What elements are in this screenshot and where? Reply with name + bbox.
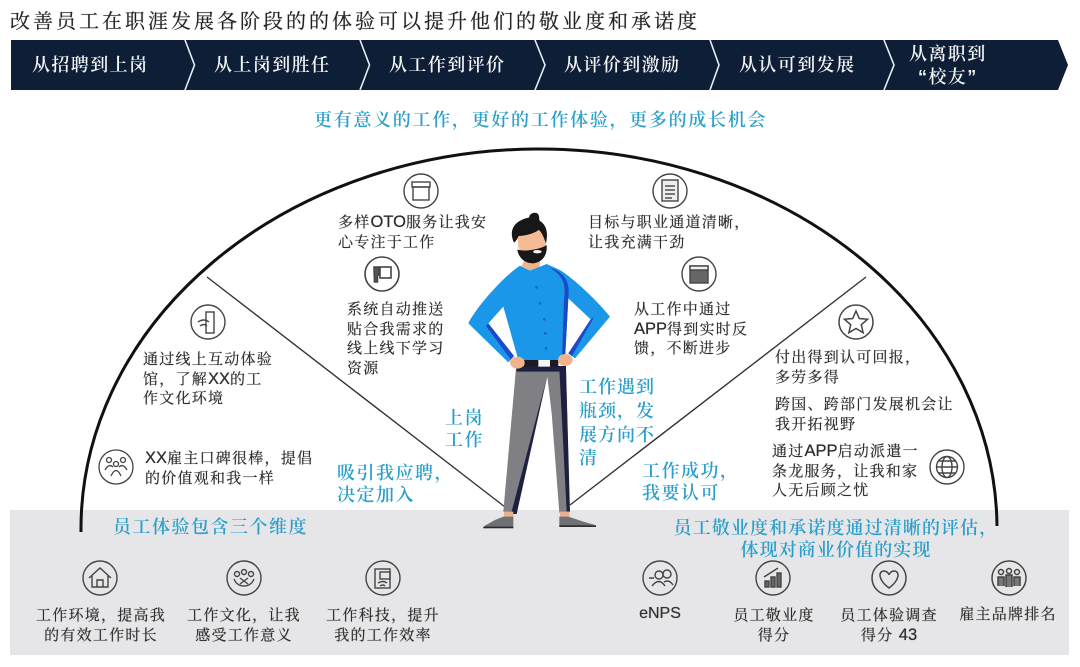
text: dispatch service [772,442,919,499]
text: clear goals [588,214,751,250]
grey foundation band [10,510,1069,655]
text: push learning [347,301,445,376]
icon: culture group [227,561,261,595]
text: reward: 多劳多得 [775,368,840,386]
text: reward: 付出得到认可回报， [775,349,921,366]
text: dispatch service: 通过APP启动派遣一 [772,442,919,460]
heading: engagement measurement: 员工敬业度和承诺度通过清晰的评估， [674,518,998,538]
text: dispatch service: 条龙服务，让我和家 [772,462,918,480]
text: OTO service: 心专注于工作 [338,234,436,250]
blue label: onboarding: 上岗 [445,408,484,428]
label: engagement score: 得分 [758,626,790,644]
blue label: bottleneck: 工作遇到 [579,377,655,397]
icon: person with screen [365,257,399,291]
text: push learning: 贴合我需求的 [347,320,445,338]
text: realtime feedback: 从工作中通过 [634,301,732,318]
heading: engagement measurement [674,518,998,560]
text: OTO service [338,213,487,250]
label: work environment: 工作环境，提高我 [36,607,166,624]
label: work environment [36,606,166,644]
label: work technology: 工作科技，提升 [326,607,440,624]
label: work culture: 感受工作意义 [195,626,293,644]
step 5 label: 从认可到发展 [739,55,855,75]
text: online experience: 作文化环境 [143,390,224,407]
chevron process bar [11,40,1068,90]
text: OTO service: 多样OTO服务让我安 [338,213,487,231]
text: cross-border development: 跨国、跨部门发展机会让 [775,396,954,413]
divider line left [207,277,505,507]
icon: star [839,305,873,339]
semi-elliptical arc [81,149,997,532]
blue label: attract [337,463,454,505]
label: work culture [187,607,301,644]
icon: employer brand team [992,561,1026,595]
icon: house [83,561,117,595]
label: experience score: 员工体验调查 [840,607,938,624]
blue headline: 更有意义的工作，更好的工作体验，更多的成长机会 [314,110,767,130]
blue label: bottleneck: 瓶颈，发 [579,401,655,421]
label: experience score: 得分 43 [861,626,917,644]
step 6 label: 从离职到 [909,44,987,64]
blue label: onboarding [445,408,484,450]
step 4 label: 从评价到激励 [564,55,680,75]
text: online experience: 通过线上互动体验 [143,351,273,368]
text: employer reputation [145,449,313,486]
text: reward [775,349,921,386]
text: push learning: 系统自动推送 [347,301,445,318]
text: clear goals: 目标与职业通道清晰， [588,214,751,231]
divider line right [570,277,866,505]
blue label: bottleneck: 展方向不 [579,425,655,445]
icon: calendar [682,257,716,291]
icon: work technology [366,561,400,595]
icon: gift [404,174,438,208]
label: eNPS: eNPS [639,605,681,622]
icon: heart [872,561,906,595]
blue label: recognition: 工作成功， [642,461,740,481]
label: engagement score [733,607,815,644]
icon: wifi phone [191,305,225,339]
text: push learning: 资源 [347,360,380,376]
icon: growth chart [756,561,790,595]
text: realtime feedback [634,301,748,357]
figure: standing man [468,213,610,528]
text: cross-border development [775,396,954,432]
icon: eNPS people [643,561,677,595]
text: employer reputation: 的价值观和我一样 [145,470,275,486]
text: online experience: 馆，了解XX的工 [143,370,263,388]
text: dispatch service: 人无后顾之忧 [772,482,870,499]
step 2 label: 从上岗到胜任 [214,55,330,75]
text: realtime feedback: APP得到实时反 [634,320,748,338]
label: experience score [840,607,938,644]
icon: group of people [99,450,133,484]
label: work technology: 我的工作效率 [334,626,432,644]
icon: globe [930,450,964,484]
label: work technology [326,607,440,644]
text: push learning: 线上线下学习 [347,340,445,357]
label: engagement score: 员工敬业度 [733,607,815,624]
text: employer reputation: XX雇主口碑很棒，提倡 [145,449,313,467]
step 1 label: 从招聘到上岗 [32,55,148,75]
blue label: attract: 决定加入 [337,485,415,505]
blue label: bottleneck [579,377,655,468]
title: 改善员工在职涯发展各阶段的的体验可以提升他们的敬业度和承诺度 [10,11,700,33]
text: clear goals: 让我充满干劲 [588,234,686,250]
label: employer brand rank: 雇主品牌排名 [959,606,1057,623]
step 6 label: “校友” [918,67,978,87]
blue label: recognition [642,461,740,503]
heading: three dimensions: 员工体验包含三个维度 [113,517,308,537]
text: realtime feedback: 馈，不断进步 [634,340,732,357]
step 3 label: 从工作到评价 [389,55,505,75]
label: work environment: 的有效工作时长 [44,626,158,644]
heading: engagement measurement: 体现对商业价值的实现 [740,540,932,560]
blue label: attract: 吸引我应聘， [337,463,454,483]
blue label: recognition: 我要认可 [642,483,720,503]
text: online experience [143,351,273,407]
blue label: bottleneck: 清 [579,448,598,468]
icon: NPS clipboard [653,174,687,208]
text: cross-border development: 我开拓视野 [775,416,856,432]
step 6 label [909,44,987,87]
blue label: onboarding: 工作 [445,430,484,450]
label: work culture: 工作文化，让我 [187,607,301,624]
